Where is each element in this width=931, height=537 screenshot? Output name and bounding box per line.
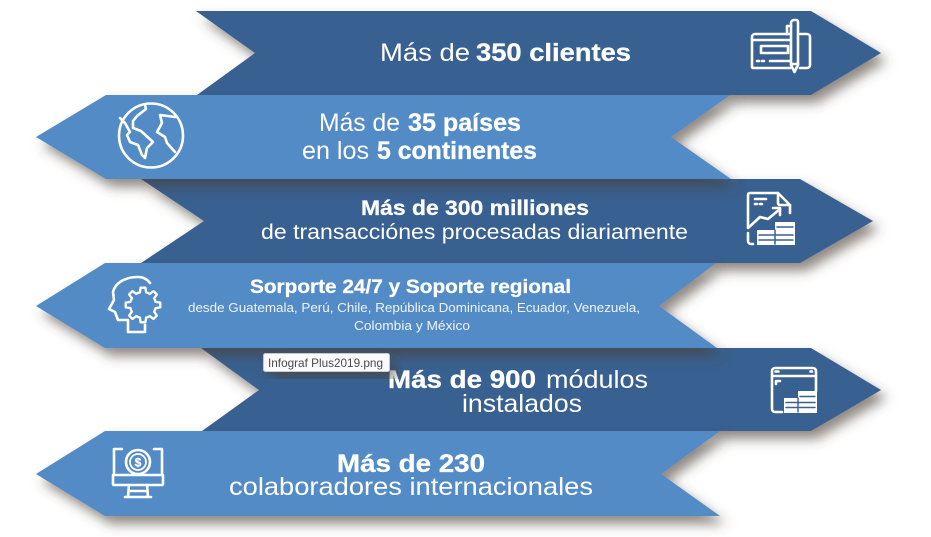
text: modules: [388, 366, 648, 418]
text: clients: [380, 39, 631, 67]
text: transactions: Más de 300 milliones: [361, 197, 589, 220]
text: modules: Más de 900: [388, 366, 536, 394]
text: support: Sorporte 24/7 y Soporte regional: [250, 277, 571, 298]
text: modules: módulos: [546, 366, 648, 394]
icon: globe: [119, 104, 183, 168]
text: countries: 35 países: [408, 109, 521, 137]
text: support: [188, 277, 640, 333]
arrow band 5: modules: [201, 348, 881, 431]
icon: check and pen: [752, 20, 810, 72]
arrow band 1: clients: [196, 11, 881, 95]
text: transactions: de transacciónes procesadas diariamente: [261, 221, 688, 244]
text: support: desde Guatemala, Perú, Chile, República Dominicana, Ecuador, Venezuela,: [188, 300, 640, 315]
text: countries: 5 continentes: [377, 137, 537, 165]
arrow band 4: support: [36, 263, 717, 348]
arrow band 6: collaborators: [36, 431, 720, 516]
text: countries: en los: [302, 137, 369, 165]
text: support: Colombia y México: [354, 318, 470, 333]
arrow band 2: countries: [36, 95, 731, 179]
text: clients: Más de: [380, 39, 470, 67]
text: collaborators: Más de 230: [337, 450, 485, 478]
icon: chart document: [748, 193, 795, 245]
text: modules: instalados: [462, 390, 582, 418]
icon: window with table: [772, 368, 817, 413]
arrow band 3: transactions: [141, 179, 873, 263]
icon: monitor with dollar: [113, 449, 163, 497]
text: countries: [302, 109, 537, 165]
text: collaborators: colaboradores internacionales: [229, 473, 593, 501]
tooltip: file name: Infograf Plus2019.png: [268, 356, 383, 370]
text: transactions: [261, 197, 688, 244]
text: countries: Más de: [319, 109, 400, 137]
text: clients: 350 clientes: [476, 39, 631, 67]
icon: monitor with dollar: $: [135, 456, 142, 470]
icon: head with gear: [109, 277, 160, 332]
text: collaborators: [229, 450, 593, 501]
